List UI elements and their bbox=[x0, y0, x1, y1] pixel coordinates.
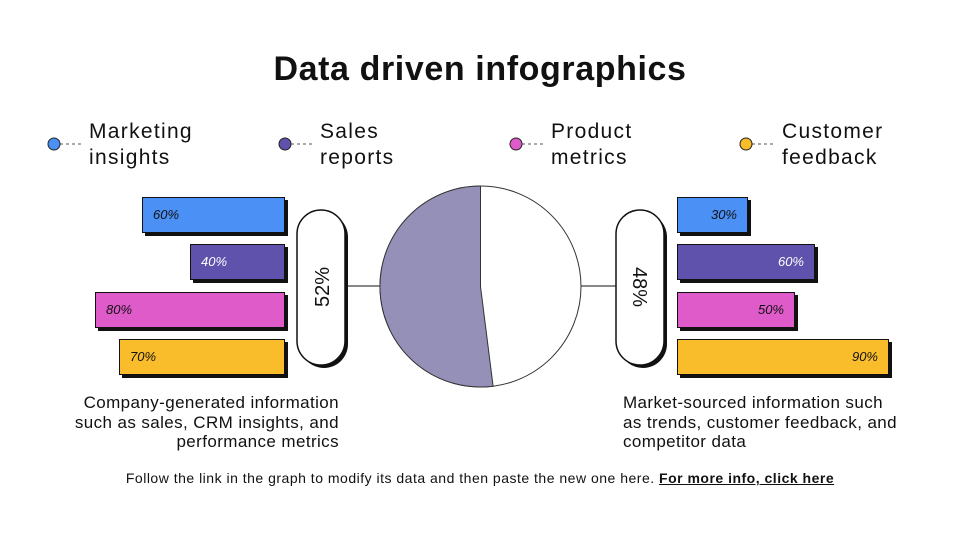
footer note: Follow the link in the graph to modify its data and then paste the new one here. For more info, click here bbox=[126, 470, 834, 486]
legend: Product bbox=[551, 120, 632, 143]
right description: competitor data bbox=[623, 432, 746, 451]
left bars bbox=[95, 197, 288, 378]
pill: 48% bbox=[616, 210, 667, 368]
right description bbox=[623, 393, 897, 451]
left bars: 60% bbox=[153, 207, 179, 222]
legend: Customer bbox=[782, 120, 883, 143]
pill: 52%: 52% bbox=[312, 267, 334, 307]
legend: Sales bbox=[320, 120, 379, 143]
right bars: 60% bbox=[778, 254, 804, 269]
legend: insights bbox=[89, 146, 171, 169]
right description: Market-sourced information such bbox=[623, 393, 883, 412]
left bars: 40% bbox=[201, 254, 227, 269]
right bars: 50% bbox=[758, 302, 784, 317]
pill: 52% bbox=[297, 210, 348, 368]
left description bbox=[75, 393, 339, 451]
left description: performance metrics bbox=[176, 432, 339, 451]
legend: reports bbox=[320, 146, 394, 169]
legend: metrics bbox=[551, 146, 628, 169]
right description: as trends, customer feedback, and bbox=[623, 412, 897, 432]
pie chart bbox=[380, 186, 581, 387]
pill: 48%: 48% bbox=[628, 267, 650, 307]
legend bbox=[48, 120, 883, 169]
right bars: 90% bbox=[852, 349, 878, 364]
title: Data driven infographics bbox=[273, 50, 687, 88]
left description: such as sales, CRM insights, and bbox=[75, 412, 339, 432]
left description: Company-generated information bbox=[84, 393, 339, 412]
left bars: 80% bbox=[106, 302, 132, 317]
right bars bbox=[677, 197, 892, 378]
left bars: 70% bbox=[130, 349, 156, 364]
legend: feedback bbox=[782, 146, 878, 169]
right bars: 30% bbox=[711, 207, 737, 222]
legend: Marketing bbox=[89, 120, 193, 143]
